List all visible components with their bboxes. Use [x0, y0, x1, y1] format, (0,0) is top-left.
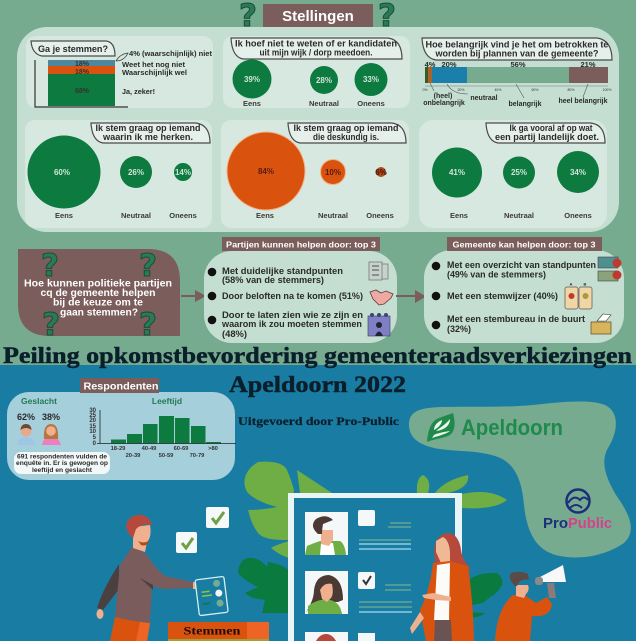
list: municipality: Met een stemwijzer (40%) [447, 291, 558, 301]
bubble chart: landelijk: Oneens [564, 211, 592, 220]
heading: parties top 3 [222, 237, 380, 251]
bubble chart: deskundigheid: 6% [375, 168, 387, 177]
note: respondents: leeftijd en geslacht [32, 468, 92, 474]
speech bubble: landelijk: Ik ga vooral af op wat [510, 123, 593, 133]
speech bubble: deskundigheid: Ik stem graag op iemand [294, 123, 398, 133]
bubble chart: wijk of dorp: Eens [243, 99, 261, 108]
callout: central question: ? [41, 248, 59, 284]
histogram: age [89, 408, 236, 459]
bubble chart: wijk of dorp [232, 60, 388, 108]
icon: stemwijzer A B [565, 282, 592, 309]
speech bubble: wijk of dorp [231, 38, 402, 59]
stacked bar chart: betrokkenheid: onbelangrijk [423, 100, 465, 107]
bubble chart: deskundigheid: 84% [258, 167, 274, 176]
note: respondents: 691 respondenten vulden de [17, 454, 108, 460]
histogram: age: 0 [93, 441, 97, 447]
panel: Ga je stemmen [26, 36, 213, 108]
callout: central question: gaan stemmen? [60, 308, 138, 318]
histogram: age: 10 [89, 429, 97, 435]
list: parties: waarom ik zou moeten stemmen [221, 319, 362, 329]
list: municipality [432, 260, 596, 334]
histogram: age: 70-79 [190, 453, 205, 459]
stacked bar chart: betrokkenheid: 20% [441, 60, 457, 69]
stacked bar chart: betrokkenheid: heel belangrijk [558, 98, 608, 105]
candidate card 1 [305, 512, 348, 555]
logo blob [409, 402, 631, 557]
list: municipality: (49% van de stemmers) [447, 270, 546, 280]
stacked bar chart: betrokkenheid: (heel) [434, 93, 452, 100]
stacked bar chart: betrokkenheid: 60% [531, 88, 539, 92]
panel: herkenning [25, 120, 212, 228]
list: municipality: Met een overzicht van standpunten [447, 260, 596, 270]
icon: stemwijzer A B: A [570, 282, 573, 286]
callout: central question: Hoe kunnen politieke partijen [24, 278, 172, 290]
bubble chart: landelijk: Eens [450, 211, 468, 220]
bubble chart: deskundigheid [227, 132, 394, 220]
icon: stemwijzer A B: B [584, 282, 587, 286]
speech bubble: herkenning: waarin ik me herken. [102, 132, 193, 142]
icon: man [17, 424, 36, 445]
bubble chart: wijk of dorp: 28% [316, 76, 332, 85]
stacked bar chart: betrokkenheid: belangrijk [508, 101, 542, 108]
histogram: age: 18-29 [111, 446, 126, 452]
heading: municipality top 3 [447, 237, 602, 251]
bubble chart: deskundigheid: Eens [256, 211, 274, 220]
list: parties [208, 266, 363, 339]
panel: betrokkenheid bij plannen [422, 38, 612, 108]
callout: central question: ? [139, 307, 157, 343]
list: parties: (58% van de stemmers) [222, 275, 324, 285]
bubble chart: landelijk: 25% [511, 168, 527, 177]
bubble chart: wijk of dorp: Oneens [357, 99, 385, 108]
stacked bar chart: betrokkenheid: 40% [494, 88, 502, 92]
speech bubble: Ga je stemmen: Ga je stemmen? [38, 44, 108, 54]
gender percentages [17, 412, 60, 422]
heading: municipality top 3: Gemeente kan helpen door: top 3 [452, 240, 596, 250]
checkboxes [358, 510, 375, 641]
callout: central question: ? [139, 248, 157, 284]
illustration: voting screen [288, 493, 462, 641]
bubble chart: herkenning: Neutraal [121, 211, 151, 220]
speech bubble: wijk of dorp: uit mijn wijk / dorp meedoen. [260, 48, 372, 58]
icon: handshake [370, 290, 393, 305]
speech bubble: deskundigheid [288, 123, 406, 143]
heading: parties top 3: Partijen kunnen helpen door: top 3 [226, 240, 376, 250]
form lines [359, 523, 412, 612]
list: municipality: (32%) [447, 324, 471, 334]
histogram: age: >80 [208, 446, 218, 452]
icon: woman [42, 424, 61, 445]
list: municipality: Met een stembureau in de buurt [447, 314, 585, 324]
panel: wijk of dorp [223, 36, 410, 108]
title: Peiling opkomstbevordering gemeenteraadsverkiezingen [3, 343, 632, 368]
arrow: to parties panel [181, 290, 206, 302]
gender percentages: 62% [17, 412, 35, 422]
stacked bar chart: betrokkenheid: 4% [425, 60, 436, 69]
panel: statements [17, 27, 619, 232]
histogram: age: 20-39 [126, 453, 141, 459]
icon: ballot lists [598, 257, 622, 281]
panel: respondents [7, 378, 236, 480]
speech bubble: herkenning: Ik stem graag op iemand [96, 123, 200, 133]
icon: documents [369, 262, 388, 280]
histogram: age: 5 [93, 435, 97, 441]
bubble chart: deskundigheid: Oneens [366, 211, 394, 220]
logo: ProPublic: Pro [543, 515, 568, 532]
bubble chart: herkenning: 60% [54, 168, 70, 177]
stacked bar chart: betrokkenheid: neutraal [470, 95, 498, 102]
speech bubble: Ga je stemmen [31, 41, 115, 56]
panel: deskundigheid [221, 120, 409, 228]
stacked bar chart: stemintentie [35, 49, 212, 107]
heading: respondents: Respondenten [84, 382, 158, 392]
bubble chart: herkenning: 14% [175, 168, 191, 177]
bubble chart: landelijk [432, 148, 599, 220]
heading: Stellingen: Stellingen [282, 8, 354, 25]
callout: central question: cq de gemeente helpen [40, 288, 156, 299]
panel: landelijk [419, 120, 607, 228]
label: Stemmen: Stemmen [184, 624, 241, 638]
heading: respondents [80, 378, 159, 393]
callout: central question [18, 248, 180, 343]
bubble chart: wijk of dorp: 39% [244, 75, 260, 84]
histogram: age: 25 [89, 413, 97, 419]
stacked bar chart: betrokkenheid: 56% [510, 60, 526, 69]
label: Stemmen [168, 622, 269, 641]
stacked bar chart: stemintentie: Weet het nog niet [122, 60, 185, 69]
background: green upper section [0, 0, 636, 365]
callout: central question: ? [42, 307, 60, 343]
bubble chart: herkenning [28, 136, 197, 220]
logo: ProPublic [543, 490, 612, 532]
speech bubble: wijk of dorp: Ik hoef niet te weten of er kandidaten [235, 38, 397, 48]
stacked bar chart: stemintentie: Ja, zeker! [122, 87, 155, 96]
bubble chart: wijk of dorp: 33% [363, 75, 379, 84]
stacked bar chart: stemintentie: 18% [75, 61, 90, 68]
icon: candidates [368, 313, 390, 336]
stacked bar chart: betrokkenheid: 80% [567, 88, 575, 92]
stacked bar chart: stemintentie: 18% [75, 69, 90, 76]
gender percentages: 38% [42, 412, 60, 422]
list: parties: (48%) [222, 329, 247, 339]
tablet [195, 576, 228, 616]
note: respondents: enquête in. Er is gewogen op [16, 461, 108, 467]
note: respondents [14, 452, 110, 474]
bubble chart: wijk of dorp: Neutraal [309, 99, 339, 108]
panel: municipality top 3 [424, 237, 624, 343]
bubble chart: herkenning: Oneens [169, 211, 197, 220]
bubble chart: landelijk: 34% [570, 168, 586, 177]
bubble chart: herkenning: Eens [55, 211, 73, 220]
speech bubble: betrokkenheid [422, 38, 612, 60]
stacked bar chart: betrokkenheid: 0% [422, 88, 428, 92]
histogram: age: 50-59 [159, 453, 174, 459]
stacked bar chart: stemintentie: Waarschijnlijk wel [122, 68, 187, 77]
logo: ProPublic: Public [568, 515, 612, 532]
logo: Apeldoorn: Apeldoorn [461, 415, 563, 440]
checkmark icons [176, 507, 229, 553]
histogram: age: 15 [89, 424, 97, 430]
candidate card 3 [305, 632, 348, 641]
list: parties: Door beloften na te komen (51%) [222, 291, 363, 301]
list: parties: Door te laten zien wie ze zijn en [222, 310, 363, 320]
histogram: age: 40-49 [142, 446, 157, 452]
subtitle: Uitgevoerd door Pro-Public [238, 414, 400, 428]
illustration: plants [238, 462, 507, 618]
histogram: age: 30 [89, 408, 97, 414]
bubble chart: herkenning: 26% [128, 168, 144, 177]
logo: Apeldoorn [427, 413, 563, 442]
candidate card 2 [305, 571, 348, 614]
arrow: to municipality panel [396, 290, 426, 303]
bubble chart: landelijk: 41% [449, 168, 465, 177]
list: parties: Met duidelijke standpunten [222, 266, 343, 276]
speech bubble: betrokkenheid: Hoe belangrijk vind je het om betrokken te [426, 40, 609, 50]
illustration: man with megaphone [495, 565, 566, 641]
stacked bar chart: betrokkenheid: 100% [603, 88, 611, 92]
bubble chart: landelijk: Neutraal [504, 211, 534, 220]
histogram: age: 20 [89, 418, 97, 424]
stacked bar chart: betrokkenheid: 20% [457, 88, 465, 92]
speech bubble: landelijk [486, 123, 605, 143]
speech bubble: betrokkenheid: worden bij plannen van de gemeente? [434, 48, 598, 58]
title: Apeldoorn 2022 [229, 372, 406, 397]
stacked bar chart: stemintentie: 4% (waarschijnlijk) niet [129, 49, 212, 58]
callout: central question: bij de keuze om te [53, 298, 143, 308]
histogram: age: 60-69 [174, 446, 189, 452]
gender label: Geslacht [21, 396, 57, 406]
stacked bar chart: stemintentie: 68% [75, 88, 90, 95]
background: blue lower section [0, 365, 636, 641]
illustration: woman [410, 533, 474, 641]
age label: Leeftijd [152, 396, 182, 406]
speech bubble: deskundigheid: die deskundig is. [313, 132, 379, 142]
bubble chart: deskundigheid: Neutraal [318, 211, 348, 220]
stacked bar chart: betrokkenheid: 21% [580, 60, 596, 69]
icon: ballot box [591, 314, 611, 334]
heading: Stellingen [263, 4, 373, 27]
illustration: man with tablet [96, 507, 229, 641]
speech bubble: landelijk: een partij landelijk doet. [495, 132, 599, 142]
title [3, 343, 632, 397]
bubble chart: deskundigheid: 10% [325, 168, 341, 177]
panel: parties top 3 [204, 237, 397, 343]
stacked bar chart: betrokkenheid [422, 60, 611, 108]
speech bubble: herkenning [91, 123, 210, 143]
